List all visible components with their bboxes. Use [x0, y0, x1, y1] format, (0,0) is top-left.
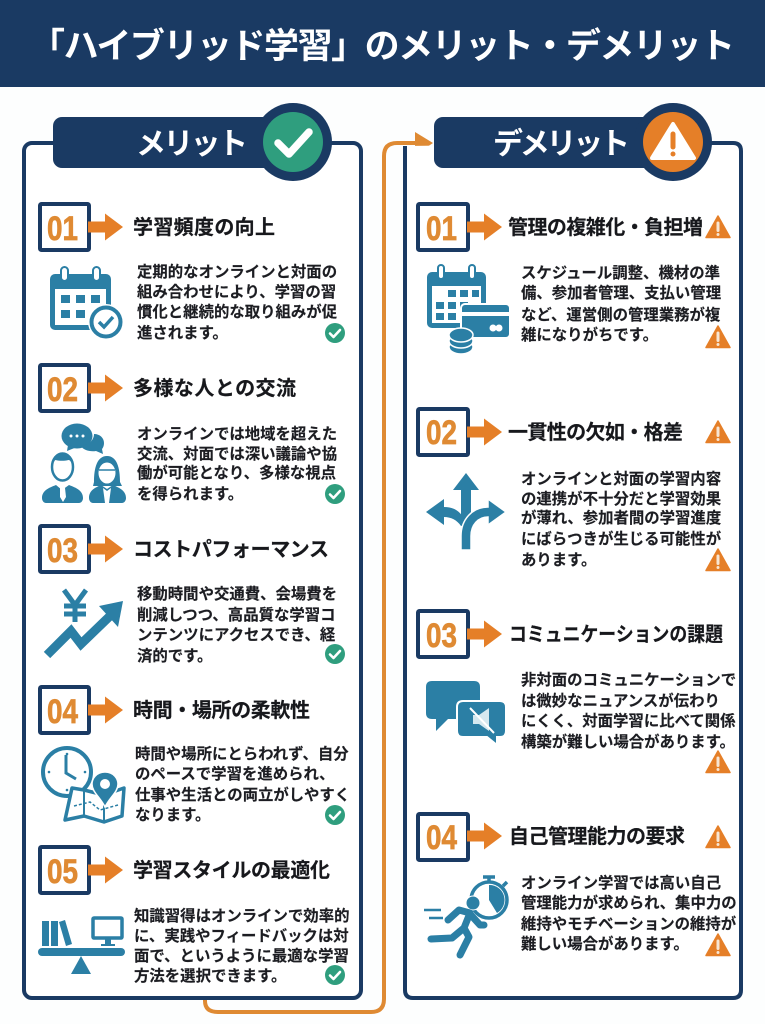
body text: 仕事や生活との両立がしやすく — [135, 785, 350, 804]
body text: 組み合わせにより、学習の習 — [137, 282, 336, 301]
body text: 時間や場所にとらわれず、自分 — [135, 745, 349, 763]
body text — [135, 745, 350, 824]
body text: は微妙なニュアンスが伝わり — [521, 691, 720, 710]
demerit 03: 03 — [426, 617, 457, 655]
demerit 01: 管理の複雑化・負担増 — [508, 216, 703, 239]
body text: など、運営側の管理業務が複 — [521, 305, 721, 324]
body text: 管理能力が求められ、集中力の — [521, 893, 737, 912]
demerit 04 — [418, 814, 737, 956]
body text: 難しい場合があります。 — [521, 934, 689, 953]
icon: calendar, card and coins — [427, 265, 510, 354]
body text: 済的です。 — [137, 647, 212, 665]
body text: 知識習得はオンラインで効率的 — [134, 906, 349, 925]
body text: 方法を選択できます。 — [134, 966, 286, 985]
body text: 雑になりがちです。 — [521, 325, 658, 344]
body text — [521, 671, 736, 751]
demerit 04: 04 — [426, 819, 457, 857]
body text: 働が可能となり、多様な視点 — [137, 463, 336, 482]
body text: 削減しつつ、高品質な学習コ — [137, 605, 336, 624]
body text — [137, 263, 338, 342]
body text: 交流、対面では深い議論や協 — [137, 445, 337, 463]
demerit 02 — [418, 409, 730, 570]
demerit header ribbon — [434, 103, 712, 181]
demerit 03: コミュニケーションの課題 — [509, 623, 723, 646]
body text: オンライン学習では高い自己 — [521, 873, 721, 892]
merit 05: 学習スタイルの最適化 — [133, 859, 330, 882]
icon: clock and map pin — [43, 748, 124, 822]
demerit header ribbon: デメリット — [493, 127, 630, 161]
icon: calendar with check — [50, 267, 124, 340]
merit 02 — [40, 365, 345, 504]
body text: 備、参加者管理、支払い管理 — [521, 283, 721, 302]
body text: あります。 — [521, 551, 596, 569]
merit 02: 多様な人との交流 — [133, 377, 296, 400]
merit header ribbon — [53, 103, 332, 181]
merit 04: 04 — [47, 693, 78, 731]
icon: branching arrows — [426, 473, 506, 550]
body text: なります。 — [135, 806, 210, 824]
body text: が薄れ、参加者間の学習進度 — [521, 508, 721, 527]
merit 01: 01 — [47, 210, 78, 248]
body text: 面で、というように最適な学習 — [134, 946, 349, 965]
icon: check badge — [325, 484, 345, 504]
demerit 02: 一貫性の欠如・格差 — [508, 420, 683, 444]
body text — [521, 263, 721, 344]
merit 01: 学習頻度の向上 — [133, 216, 275, 239]
demerit 01: 01 — [426, 210, 457, 248]
body text — [521, 873, 737, 953]
body text: 進されます。 — [137, 324, 228, 342]
demerit 03 — [418, 611, 736, 772]
body text: に、実践やフィードバックは対 — [134, 927, 349, 945]
body text: を得られます。 — [137, 485, 243, 503]
icon: muted chat bubbles — [426, 681, 506, 745]
icon: check badge — [325, 323, 345, 343]
body text: 移動時間や交通費、会場費を — [137, 585, 337, 603]
body text: の連携が不十分だと学習効果 — [521, 489, 722, 508]
merit 05: 05 — [47, 853, 78, 891]
body text: 維持やモチベーションの維持が — [521, 914, 737, 933]
icon: check badge — [325, 805, 345, 825]
body text: 慣化と継続的な取り組みが促 — [137, 302, 338, 321]
title banner: 「ハイブリッド学習」のメリット・デメリット — [30, 26, 735, 66]
icon: warning badge — [706, 549, 730, 570]
icon: warning badge — [706, 751, 730, 772]
icon: warning badge — [706, 934, 730, 956]
merit 02: 02 — [47, 371, 78, 409]
icon: check badge — [325, 644, 345, 664]
icon: yen and rising arrow — [47, 590, 123, 655]
icon: runner with stopwatch — [424, 877, 507, 955]
body text — [521, 469, 722, 569]
body text — [134, 906, 349, 985]
merit header ribbon: メリット — [136, 128, 248, 161]
body text: オンラインと対面の学習内容 — [521, 469, 721, 488]
title banner — [0, 0, 765, 87]
body text — [137, 425, 337, 503]
body text: のペースで学習を進められ、 — [135, 764, 334, 783]
body text: 非対面のコミュニケーションで — [521, 671, 736, 689]
demerit 01 — [418, 204, 730, 354]
body text: スケジュール調整、機材の準 — [521, 263, 720, 282]
icon: two people talking — [42, 424, 126, 503]
body text: 定期的なオンラインと対面の — [137, 263, 337, 281]
icon: balance of books and monitor — [38, 918, 125, 974]
demerit 04: 自己管理能力の要求 — [509, 825, 685, 848]
body text: にくく、対面学習に比べて関係 — [521, 711, 736, 730]
merit 03 — [40, 526, 345, 665]
body text — [137, 585, 337, 665]
merit 04: 時間・場所の柔軟性 — [133, 699, 310, 722]
connector arrow from merit panel to demerit panel — [205, 132, 433, 1012]
panel: merits — [24, 103, 361, 998]
merit 04 — [40, 687, 350, 825]
merit 03: コストパフォーマンス — [133, 538, 329, 561]
panel: demerits — [405, 103, 741, 998]
body text: オンラインでは地域を超えた — [137, 425, 337, 443]
icon: check badge — [325, 965, 345, 985]
body text: にばらつきが生じる可能性が — [521, 529, 722, 548]
demerit 02: 02 — [426, 414, 457, 452]
icon: warning badge — [706, 326, 730, 348]
merit 05 — [38, 847, 349, 985]
body text: 構築が難しい場合があります。 — [521, 732, 735, 751]
merit 01 — [40, 204, 345, 343]
body text: ンテンツにアクセスでき、経 — [137, 626, 336, 644]
merit 03: 03 — [47, 532, 78, 570]
